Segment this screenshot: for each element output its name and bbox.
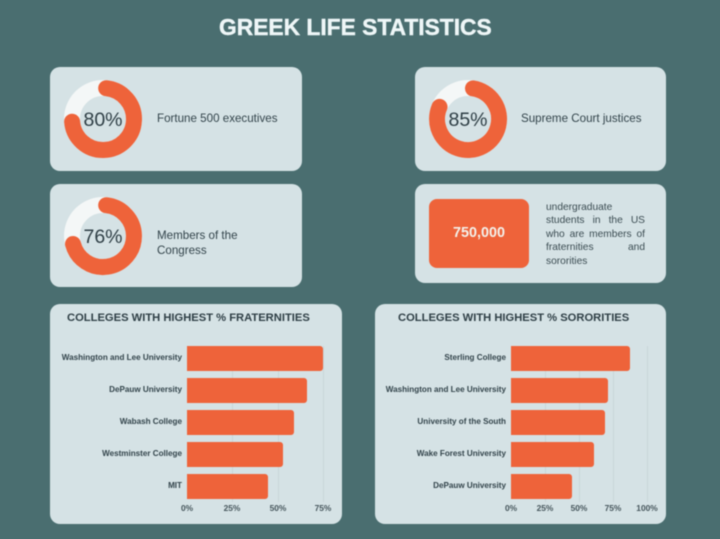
panel: Members of the Congress (50, 184, 302, 287)
bar chart: sororities (385, 345, 658, 513)
x axis labels: 50% (571, 503, 587, 513)
value: 85%: 85% (448, 109, 488, 131)
bar: University of the South: University of the South (417, 417, 506, 426)
donut: 85% (428, 80, 508, 159)
bar: MIT (168, 473, 269, 500)
value: 80%: 80% (83, 109, 123, 131)
bar: Washington and Lee University (385, 377, 609, 404)
bar: DePauw University: DePauw University (109, 385, 182, 394)
panel: Supreme Court justices (415, 67, 666, 171)
description text: sororities (546, 256, 587, 267)
callout: 750,000 (429, 199, 529, 268)
bar: Wabash College: Wabash College (120, 417, 182, 426)
x axis labels: 25% (224, 503, 240, 513)
bar: University of the South (417, 409, 606, 436)
x axis labels: 75% (605, 503, 621, 513)
label: Supreme Court justices: Supreme Court justices (521, 112, 642, 125)
bar: Wake Forest University: Wake Forest University (417, 449, 506, 458)
description text: US (631, 215, 645, 226)
label: Fortune 500 executives: Fortune 500 executives (157, 112, 278, 125)
label: Members of the Congress: Congress (157, 244, 207, 257)
heading: fraternities: COLLEGES WITH HIGHEST % FRATERNITIES (67, 312, 310, 324)
description text: who (546, 229, 565, 240)
bar: MIT: MIT (168, 481, 182, 490)
bar chart: fraternities (61, 345, 332, 513)
label: Members of the Congress (156, 229, 238, 258)
panel: Fortune 500 executives (50, 67, 302, 171)
description text: the (609, 215, 623, 226)
description text: and (628, 242, 645, 253)
description text: are (570, 229, 584, 240)
bar: Wabash College (119, 409, 295, 436)
bar: DePauw University (432, 473, 573, 500)
bar: DePauw University (108, 377, 308, 404)
bar: Washington and Lee University: Washington and Lee University (386, 385, 506, 394)
bar: Sterling College (444, 345, 631, 372)
panel: sororities chart (375, 304, 666, 524)
bar: Wake Forest University (416, 441, 595, 468)
title: GREEK LIFE STATISTICS (219, 14, 492, 40)
x axis labels: 100% (636, 503, 658, 513)
x axis labels: 50% (270, 503, 286, 513)
x axis labels (504, 503, 658, 513)
description text: fraternities (546, 242, 594, 253)
bar: Sterling College: Sterling College (444, 353, 506, 362)
x axis labels: 0% (505, 503, 517, 513)
description text: members (589, 229, 632, 240)
x axis labels: 0% (181, 503, 193, 513)
description text: in (593, 215, 601, 226)
label: Members of the Congress: Members of the (157, 229, 238, 242)
bar: Westminster College (102, 441, 284, 468)
description text: undergraduate (546, 202, 612, 213)
bar: Westminster College: Westminster College (102, 449, 182, 458)
callout: 750,000: 750,000 (453, 225, 505, 241)
description text: students (546, 215, 585, 226)
heading: sororities: COLLEGES WITH HIGHEST % SORORITIES (398, 312, 629, 324)
donut: 80% (63, 80, 143, 159)
bar: Washington and Lee University (61, 345, 324, 372)
value: 76%: 76% (83, 226, 123, 248)
donut: 76% (64, 196, 143, 276)
bar: Washington and Lee University: Washington and Lee University (62, 353, 182, 362)
x axis labels (180, 503, 332, 513)
x axis labels: 25% (537, 503, 553, 513)
panel: fraternities chart (50, 304, 342, 524)
description text: of (636, 229, 645, 240)
bar: DePauw University: DePauw University (433, 481, 506, 490)
panel: 750,000 undergraduates (415, 184, 666, 283)
description text (546, 202, 646, 267)
x axis labels: 75% (315, 503, 331, 513)
